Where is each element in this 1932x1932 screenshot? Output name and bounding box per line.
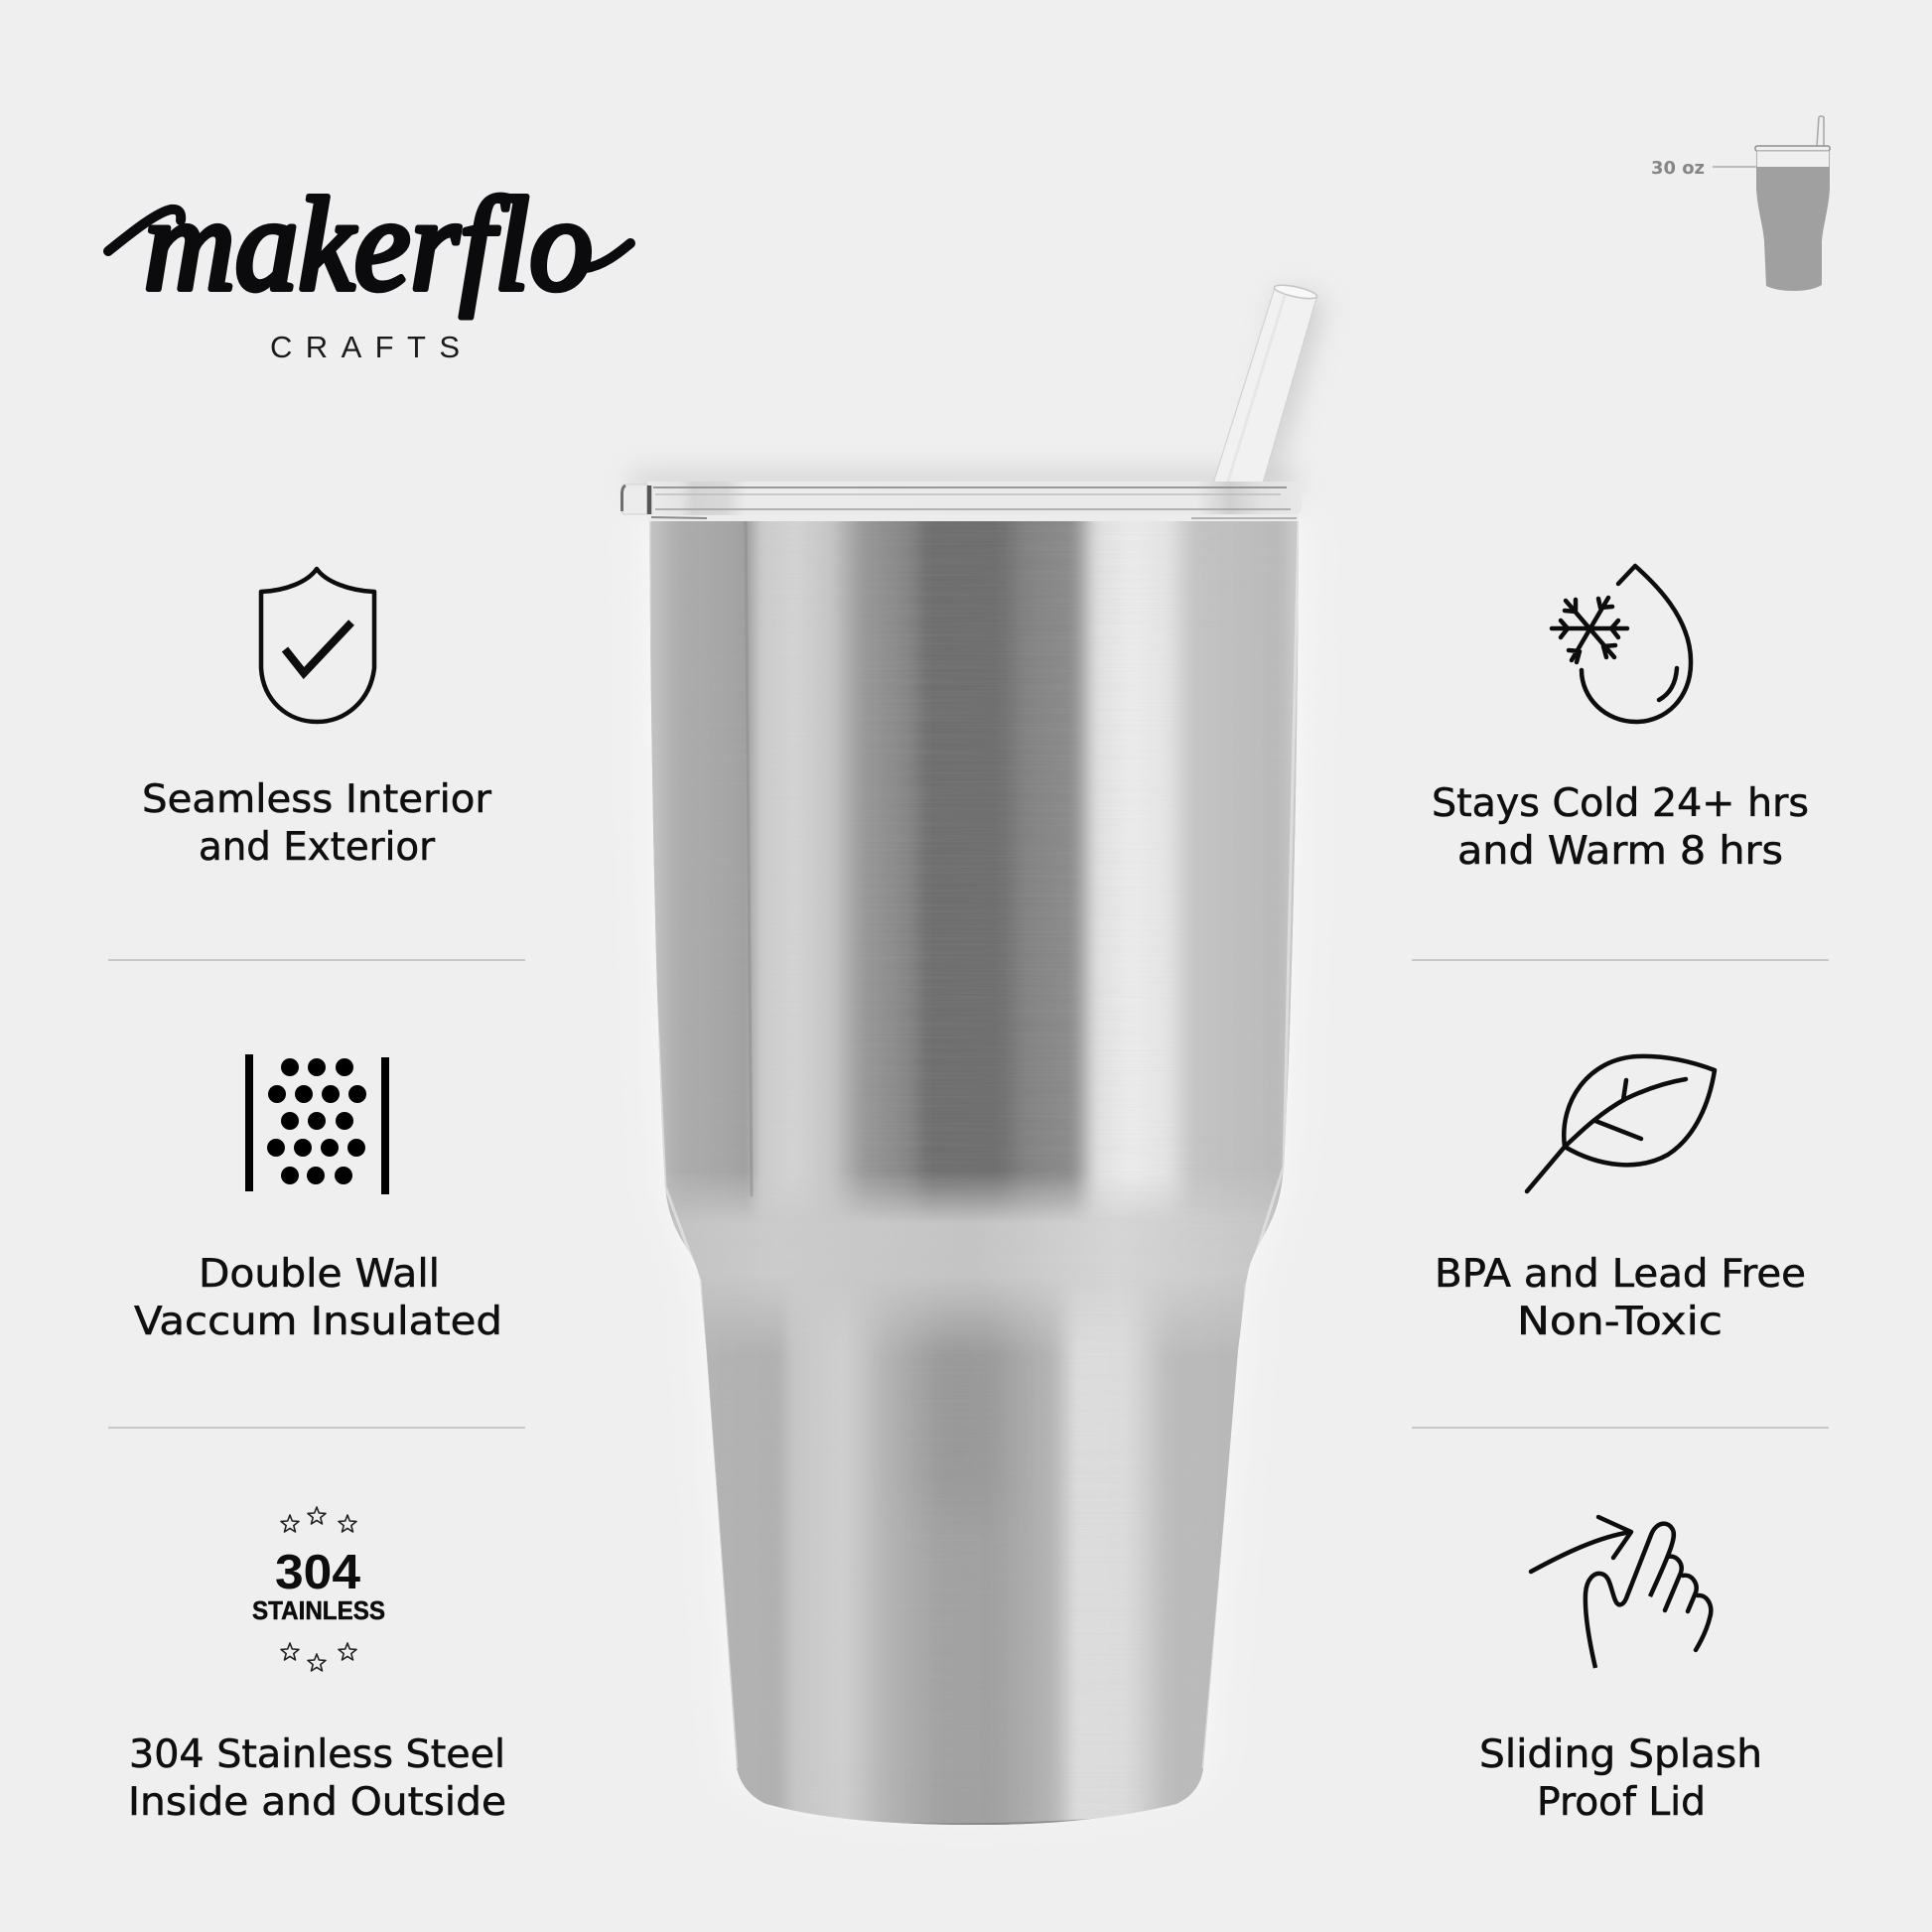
size indicator: 30 oz <box>1651 116 1830 291</box>
icon: sliding hand with arrow <box>1531 1517 1711 1668</box>
logo: makerflo crafts: makerflo <box>144 171 593 318</box>
label: double wall <box>134 1252 502 1344</box>
tumbler <box>606 283 1340 1891</box>
feature: bpa and lead free <box>1435 1056 1806 1344</box>
label: sliding splash: Sliding Splash <box>1479 1732 1762 1777</box>
label: 304 stainless steel: Inside and Outside <box>128 1780 506 1825</box>
label: sliding splash: Proof Lid <box>1537 1780 1706 1825</box>
icon: 304 stainless badge: 304 <box>275 1546 360 1599</box>
icon: 304 stainless badge: STAINLESS <box>252 1595 385 1625</box>
label: 304 stainless steel: 304 Stainless Steel <box>129 1732 505 1777</box>
icon: leaf <box>1527 1056 1715 1191</box>
icon: 304 stainless badge <box>252 1507 385 1671</box>
label: bpa free <box>1435 1252 1806 1344</box>
label: seamless <box>142 777 492 870</box>
label: stays cold: Stays Cold 24+ hrs <box>1432 781 1809 826</box>
label: bpa free: BPA and Lead Free <box>1435 1252 1806 1297</box>
lid <box>621 482 1302 521</box>
icon: snowflake and drop <box>1552 566 1691 722</box>
label: double wall: Vaccum Insulated <box>134 1300 502 1344</box>
size indicator: 30 oz: 30 oz <box>1651 158 1705 179</box>
feature: stays cold and warm <box>1432 566 1809 874</box>
feature: sliding splash proof lid <box>1479 1517 1762 1825</box>
straw <box>1212 283 1324 488</box>
label: double wall: Double Wall <box>199 1252 440 1297</box>
tumbler glow and shadow <box>631 475 1312 1822</box>
label: seamless: and Exterior <box>199 825 436 870</box>
icon: shield with check <box>261 569 374 722</box>
label: sliding splash <box>1479 1732 1762 1825</box>
label: stays cold <box>1432 781 1809 874</box>
label: stays cold: and Warm 8 hrs <box>1457 829 1783 874</box>
feature: seamless interior and exterior <box>142 569 492 870</box>
feature: 304 stainless steel <box>128 1507 506 1825</box>
label: bpa free: Non-Toxic <box>1517 1300 1723 1344</box>
feature: double wall vacuum insulated <box>134 1054 502 1344</box>
icon: insulated wall dots <box>245 1054 389 1194</box>
label: seamless: Seamless Interior <box>142 777 492 822</box>
stainless body <box>649 521 1299 1825</box>
logo: makerflo crafts <box>108 171 630 364</box>
logo: makerflo crafts: CRAFTS <box>270 330 460 364</box>
label: 304 stainless steel <box>128 1732 506 1825</box>
